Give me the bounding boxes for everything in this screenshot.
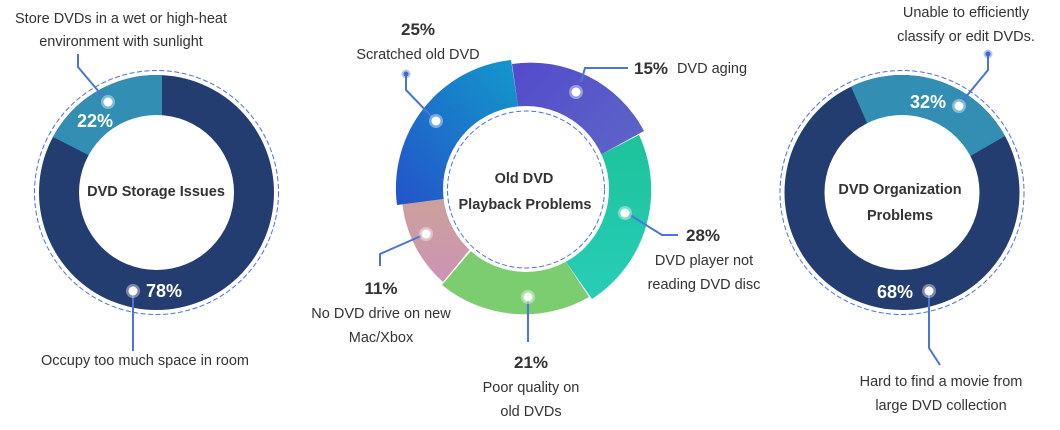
marker: 21% <box>521 290 535 304</box>
marker: 22% <box>101 95 115 109</box>
label: 28% not reading: 28% <box>686 226 720 245</box>
donut hole <box>824 115 980 270</box>
label: 28% not reading: DVD player not <box>655 253 753 269</box>
label: 28% not reading <box>648 226 760 293</box>
leader: 21% <box>527 300 529 342</box>
value: 32%: 32% <box>910 92 946 112</box>
segment: 21% poor quality <box>442 225 589 314</box>
donut hole <box>443 106 609 272</box>
leader: 25% <box>406 74 433 118</box>
panel: old DVD playback problems donut <box>311 20 760 420</box>
label: hard to find: Hard to find a movie from <box>860 374 1022 390</box>
panel: DVD organization problems donut <box>780 5 1035 414</box>
segment: 78% occupy space <box>39 75 274 310</box>
label: 21% poor quality: old DVDs <box>500 404 562 420</box>
label: 21% poor quality: Poor quality on <box>483 380 579 396</box>
marker: 28% <box>618 206 632 220</box>
label: unable to classify: Unable to efficiently <box>903 5 1029 21</box>
segment: 11% no DVD drive <box>402 190 490 282</box>
segment: 15% aging <box>512 63 644 190</box>
label: 21% poor quality <box>483 353 579 420</box>
dashed outer ring <box>34 70 278 314</box>
segment: 32% unable to classify <box>851 75 1005 165</box>
marker: 11% <box>419 227 433 241</box>
marker: 32% <box>952 99 966 113</box>
donut title: Playback Problems <box>458 197 592 213</box>
value: 78%: 78% <box>146 281 182 301</box>
panel: DVD storage issues donut <box>15 11 278 369</box>
leader: top label <box>960 54 988 104</box>
marker: 78% <box>126 284 140 298</box>
donut title: DVD Organization <box>838 182 962 198</box>
marker: top origin <box>984 50 992 58</box>
value: 68%: 68% <box>877 282 913 302</box>
marker: 15% <box>569 85 583 99</box>
label: 25% scratched: Scratched old DVD <box>356 47 480 63</box>
dashed outer ring <box>780 70 1024 314</box>
leader: bottom label <box>929 295 940 365</box>
label: wet or high heat: Store DVDs in a wet or high-heat <box>15 11 227 27</box>
label: 21% poor quality: 21% <box>514 353 548 372</box>
label: 11% no DVD drive <box>311 279 451 346</box>
value: 22%: 22% <box>77 111 113 131</box>
label: 15% aging: 15% <box>634 59 668 78</box>
leader: bottom label <box>132 295 134 351</box>
label: 11% no DVD drive: 11% <box>364 279 398 298</box>
segment: 25% scratched <box>396 60 525 205</box>
label: occupy space: Occupy too much space in room <box>41 353 249 369</box>
label: 25% scratched: 25% <box>401 20 435 39</box>
segment: 22% wet or high heat <box>53 75 162 165</box>
donut title: Problems <box>867 208 933 224</box>
label: 15% aging: DVD aging <box>677 61 747 77</box>
label: 11% no DVD drive: Mac/Xbox <box>349 330 414 346</box>
label: 11% no DVD drive: No DVD drive on new <box>311 306 451 322</box>
donut title: DVD Storage Issues <box>87 184 225 200</box>
dashed inner ring <box>448 111 604 268</box>
label: 15% aging <box>634 59 747 78</box>
marker: 68% <box>922 284 936 298</box>
label: 25% scratched <box>356 20 480 63</box>
marker: 25% origin <box>402 70 410 78</box>
label: unable to classify: classify or edit DVDs. <box>897 29 1035 45</box>
label: hard to find: large DVD collection <box>875 398 1007 414</box>
donut title: Old DVD <box>495 171 553 187</box>
marker: 25% <box>429 114 443 128</box>
donut hole <box>79 115 234 270</box>
leader: top label <box>78 54 105 99</box>
leader: 28% <box>630 215 678 235</box>
segment: 68% hard to find <box>784 75 1020 310</box>
label: 28% not reading: reading DVD disc <box>648 277 760 293</box>
leader: 11% <box>380 236 421 266</box>
segment: 28% not reading disc <box>540 135 651 299</box>
leader: 15% <box>581 68 628 82</box>
label: wet or high heat: environment with sunlight <box>39 34 203 50</box>
